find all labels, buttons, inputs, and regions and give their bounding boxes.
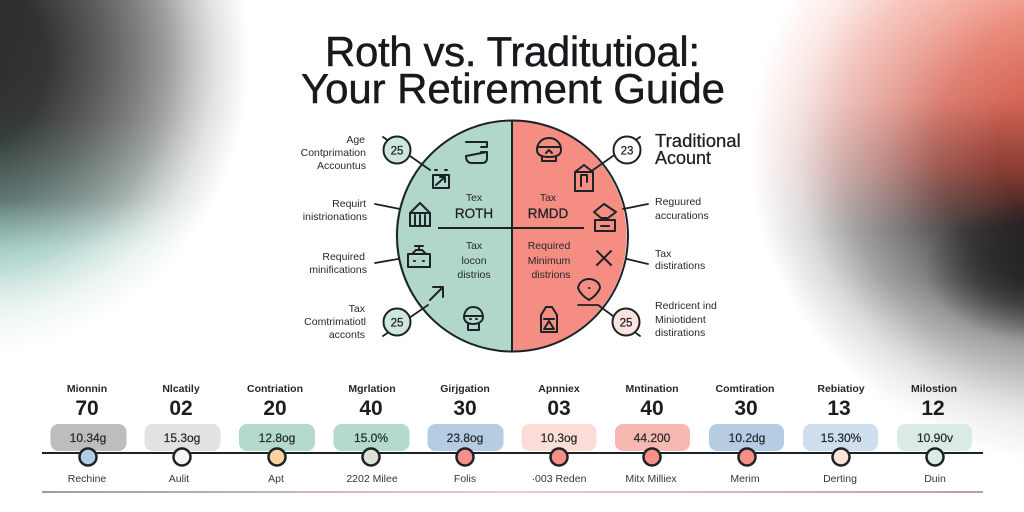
title: Your Retirement Guide	[301, 65, 725, 112]
right labels: distirations	[655, 327, 705, 339]
milestone 10: Duin	[924, 473, 946, 485]
badge: 25 bottom left: 25	[391, 318, 403, 330]
roth center text: locon	[461, 255, 487, 267]
milestone 5: Girjgation	[440, 383, 490, 395]
left labels	[301, 134, 367, 341]
milestone 4: 15.0%	[354, 431, 388, 445]
title	[301, 28, 725, 112]
roth center text: Tex	[466, 192, 483, 204]
icon: basket	[594, 204, 616, 231]
milestone 1: 70	[75, 397, 99, 420]
milestone 9: Derting	[823, 473, 857, 485]
icon: helmet right	[537, 138, 561, 161]
right labels: Redricent ind	[655, 300, 717, 312]
milestone 10: 12	[921, 397, 945, 420]
milestone 1	[50, 383, 126, 485]
left labels: Required	[322, 251, 365, 263]
icon: note	[466, 142, 487, 163]
milestone 1: Rechine	[68, 473, 106, 485]
rmd center text: RMDD	[528, 206, 568, 221]
badge: 25 bottom right	[612, 308, 640, 336]
roth center text: distrios	[457, 269, 491, 281]
milestone 8	[709, 383, 784, 485]
milestone 4: 2202 Milee	[346, 473, 398, 485]
icon: drop	[578, 279, 600, 300]
milestone 8: Merim	[730, 473, 760, 485]
milestone 8: Comtiration	[716, 383, 774, 395]
milestone 4: Mgrlation	[348, 383, 396, 395]
milestone 6: 10.3og	[541, 431, 577, 445]
milestone 8: 30	[734, 397, 758, 420]
roth center text	[455, 192, 493, 281]
milestone 7: Mitx Milliex	[625, 473, 677, 485]
milestone 10: Milostion	[911, 383, 957, 395]
milestone 6: Apnniex	[538, 383, 580, 395]
right labels: Reguured	[655, 196, 701, 208]
left labels: Accountus	[317, 160, 366, 172]
icon: lantern	[541, 307, 557, 332]
rmd center text: distrions	[531, 269, 571, 281]
milestone 5: Folis	[454, 473, 476, 485]
milestone 7	[615, 383, 690, 485]
milestone 4	[334, 383, 410, 485]
right heading	[655, 130, 741, 168]
comparison circle	[396, 120, 628, 352]
milestone 3: 20	[263, 397, 287, 420]
left labels: Contprimation	[301, 147, 366, 159]
left callouts connectors	[375, 137, 430, 336]
milestone 1: 10.34g	[70, 431, 106, 445]
bottom rule	[42, 491, 983, 493]
right labels: distirations	[655, 260, 705, 272]
milestone 5	[428, 383, 504, 485]
milestone 4: 40	[359, 397, 383, 420]
left labels: Requirt	[332, 198, 366, 210]
left labels: Comtrimatiotl	[304, 316, 366, 328]
right heading: Acount	[655, 148, 711, 168]
icon: arrow box	[433, 170, 449, 188]
rmd center text: Tax	[540, 192, 557, 204]
timeline axis	[42, 452, 983, 454]
badge: 23 top right: 23	[621, 146, 633, 158]
milestone 6	[522, 383, 596, 485]
left labels: inistrionations	[303, 211, 367, 223]
badge: 25 bottom left	[384, 308, 410, 336]
rmd center text: Minimum	[528, 255, 571, 267]
badge: 25 top left: 25	[391, 146, 403, 158]
milestone 2: 02	[169, 397, 193, 420]
milestone 2: Aulit	[169, 473, 189, 485]
milestone 1: Mionnin	[67, 383, 107, 395]
milestone 3	[239, 383, 315, 485]
milestone 2: Nlcatily	[162, 383, 200, 395]
milestone 9	[803, 383, 878, 485]
right heading: Traditional	[655, 130, 741, 151]
milestone 10	[897, 383, 972, 485]
roth center text: ROTH	[455, 206, 493, 221]
right labels	[655, 196, 717, 339]
title: Roth vs. Traditutioal:	[325, 28, 700, 75]
milestone 9: 15.30%	[821, 431, 862, 445]
milestone 2: 15.3og	[164, 431, 200, 445]
milestone 5: 23.8og	[447, 431, 483, 445]
milestone 7: 44.200	[634, 431, 671, 445]
right labels: accurations	[655, 210, 709, 222]
milestone 2	[144, 383, 220, 485]
milestone 8: 10.2dg	[729, 431, 765, 445]
icon: building	[410, 203, 430, 226]
milestone 7: 40	[640, 397, 664, 420]
icon: cross	[597, 251, 611, 265]
left labels: minifications	[309, 264, 367, 276]
icon: package	[575, 165, 593, 191]
badge: 25 bottom right: 25	[620, 318, 632, 330]
icon: arrow up right	[430, 287, 443, 300]
badge: 25 top left	[384, 136, 410, 164]
milestone 9: Rebiatioy	[817, 383, 865, 395]
milestone 6: 03	[547, 397, 571, 420]
right labels: Tax	[655, 248, 672, 260]
milestone 10: 10.90v	[917, 431, 953, 445]
milestone 6: ·003 Reden	[532, 473, 587, 485]
milestone 3: 12.8og	[259, 431, 295, 445]
badge: 23 top right	[614, 136, 640, 164]
left labels: acconts	[329, 329, 365, 341]
roth center text: Tax	[466, 240, 483, 252]
icon: helmet left	[464, 307, 483, 330]
milestone 7: Mntination	[625, 383, 679, 395]
milestone 3: Apt	[268, 473, 284, 485]
milestone 9: 13	[827, 397, 851, 420]
rmd center text: Required	[528, 240, 570, 252]
milestone 5: 30	[453, 397, 477, 420]
rmd center text	[528, 192, 571, 281]
icon: box with knob	[408, 246, 430, 267]
milestone 3: Contriation	[247, 383, 303, 395]
right labels: Miniotident	[655, 314, 706, 326]
left labels: Tax	[349, 303, 366, 315]
left labels: Age	[346, 134, 365, 146]
right callouts connectors	[578, 137, 648, 336]
